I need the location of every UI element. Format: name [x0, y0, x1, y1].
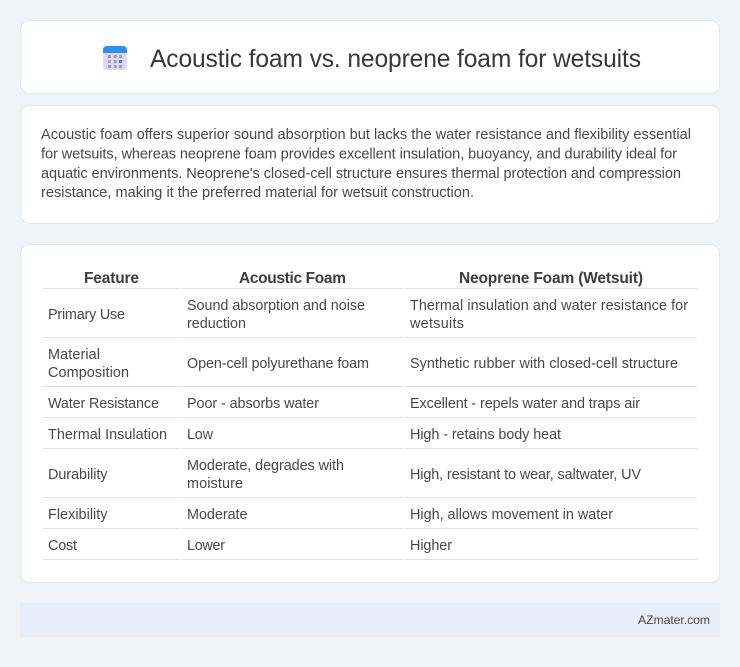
row: flexibility: Moderate	[187, 507, 248, 523]
table rules	[43, 288, 697, 560]
row: durability: moisture	[187, 476, 243, 492]
panel: summary	[20, 106, 720, 224]
row: durability	[48, 458, 641, 492]
summary text: aquatic environments. Neoprene's closed-cell structure ensures thermal protection and compression	[41, 166, 681, 182]
row: material composition: Synthetic rubber with closed-cell structure	[410, 356, 678, 372]
row: thermal insulation: High - retains body heat	[410, 427, 561, 443]
row: primary use: Thermal insulation and water resistance for	[410, 298, 688, 314]
row: material composition: Open-cell polyurethane foam	[187, 356, 369, 372]
summary text: Acoustic foam offers superior sound absorption but lacks the water resistance and flexibility essential	[41, 127, 691, 143]
table header: Acoustic Foam	[239, 270, 346, 287]
row: thermal insulation: Low	[187, 427, 214, 443]
row: primary use	[48, 298, 688, 332]
row: thermal insulation	[48, 427, 561, 443]
panel: title card	[20, 20, 720, 94]
row: water resistance: Poor - absorbs water	[187, 396, 319, 412]
row: primary use: reduction	[187, 316, 246, 332]
summary text	[41, 127, 691, 201]
row: material composition: Composition	[48, 365, 129, 381]
row: flexibility: Flexibility	[48, 507, 108, 523]
row: cost: Lower	[187, 538, 225, 554]
row: water resistance	[48, 396, 640, 412]
row: cost: Cost	[48, 538, 77, 554]
row: thermal insulation: Thermal Insulation	[48, 427, 167, 443]
row: water resistance: Water Resistance	[48, 396, 159, 412]
table header: Neoprene Foam (Wetsuit)	[459, 270, 643, 287]
row: primary use: Primary Use	[48, 307, 125, 323]
row: cost	[48, 538, 452, 554]
row: water resistance: Excellent - repels water and traps air	[410, 396, 640, 412]
summary text: resistance, making it the preferred material for wetsuit construction.	[41, 185, 474, 201]
row: material composition: Material	[48, 347, 100, 363]
table header	[84, 270, 643, 287]
row: durability: Moderate, degrades with	[187, 458, 344, 474]
row: cost: Higher	[410, 538, 452, 554]
title: Acoustic foam vs. neoprene foam for wetsuits	[150, 46, 641, 73]
row: material composition	[48, 347, 678, 381]
table header: Feature	[84, 270, 139, 287]
footer credit: AZmater.com	[638, 613, 710, 627]
row: primary use: wetsuits	[409, 316, 464, 332]
row: flexibility	[48, 507, 613, 523]
summary text: for wetsuits, whereas neoprene foam provides excellent insulation, buoyancy, and durability ideal for	[41, 146, 677, 162]
panel: comparison table	[20, 244, 720, 582]
footer bar	[20, 603, 720, 637]
icon: calendar	[103, 46, 127, 70]
row: durability: High, resistant to wear, saltwater, UV	[410, 467, 641, 483]
row: durability: Durability	[48, 467, 108, 483]
row: flexibility: High, allows movement in water	[410, 507, 613, 523]
row: primary use: Sound absorption and noise	[187, 298, 365, 314]
